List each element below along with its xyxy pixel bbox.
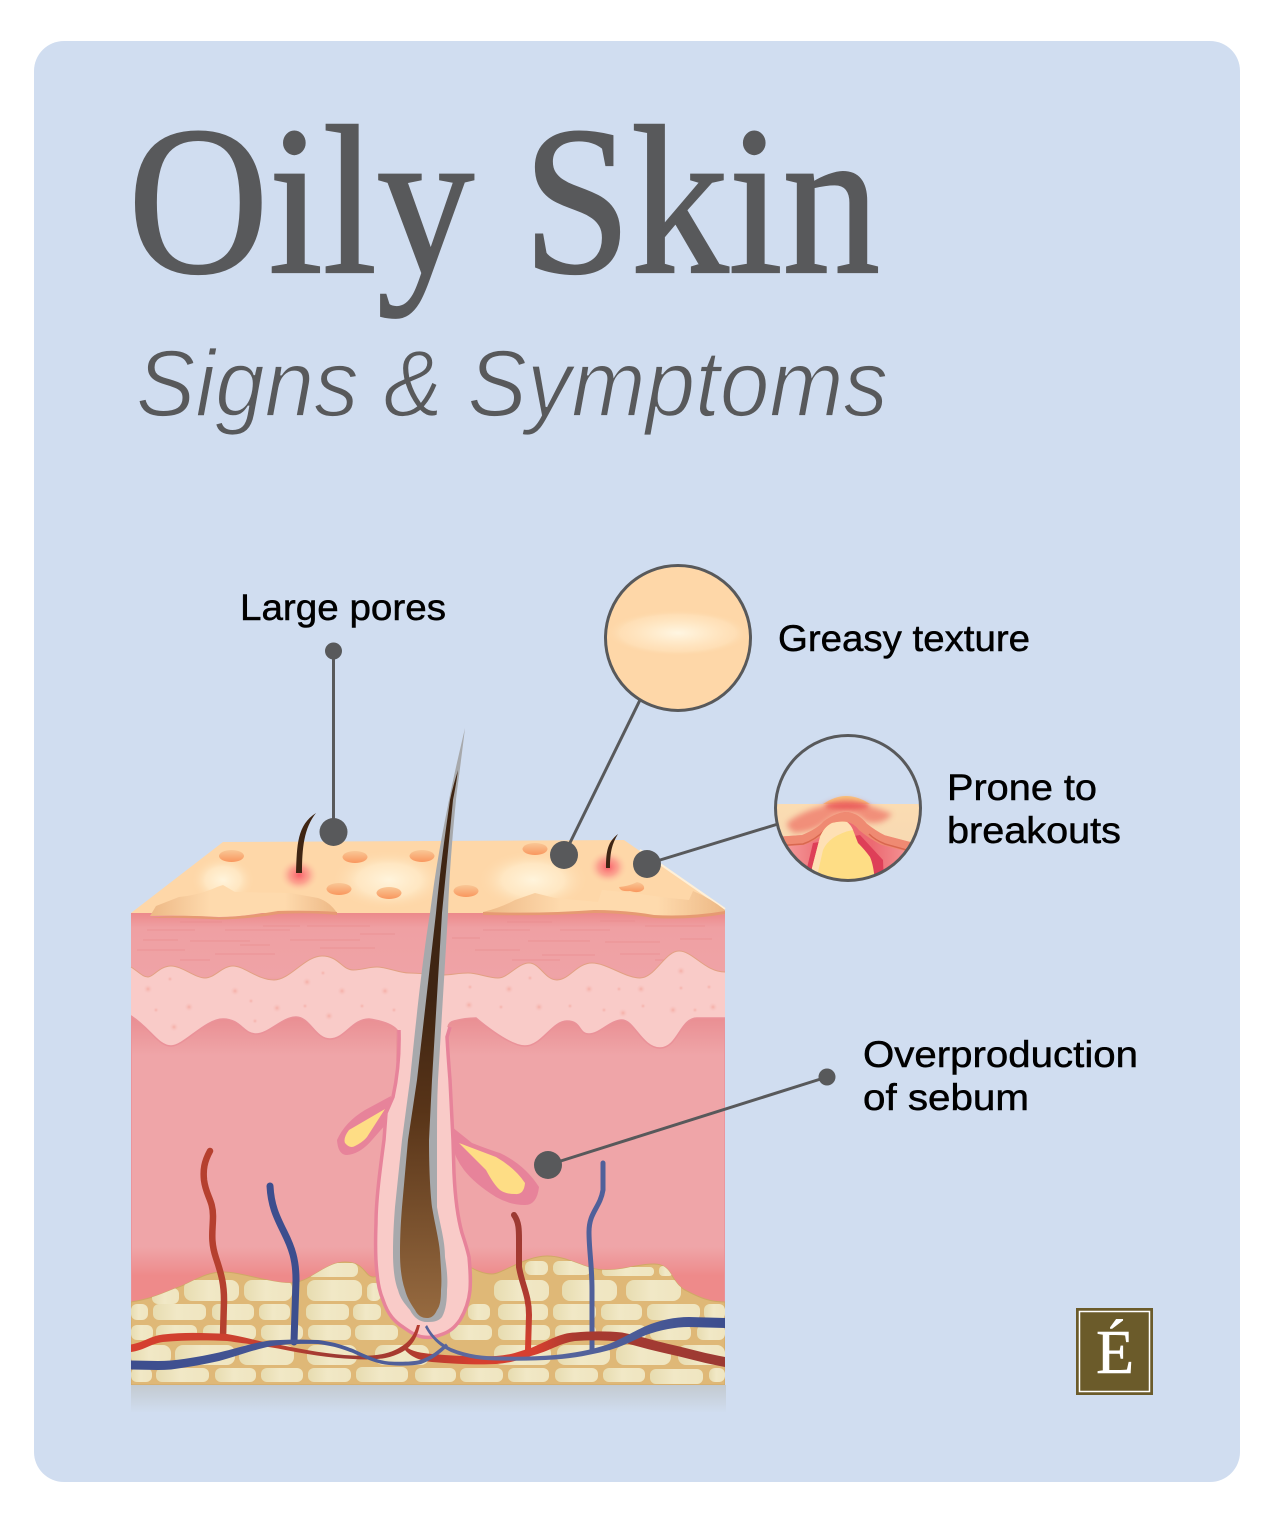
label: Greasy texture (778, 618, 1030, 659)
brand logo: É (1096, 1319, 1134, 1387)
pointer line and dots (320, 642, 348, 846)
label: breakouts (947, 810, 1121, 851)
pointer (534, 1068, 836, 1179)
skin top surface (131, 840, 725, 920)
skin cross-section diagram (131, 728, 726, 1413)
callout: prone to breakouts (633, 736, 1121, 884)
hair follicle (337, 728, 539, 1337)
follicle sheath (376, 1027, 470, 1337)
callout: large pores (240, 587, 446, 846)
small hair left (296, 813, 316, 873)
fat layer (131, 1256, 725, 1385)
small hair right (606, 834, 618, 868)
red artery right (405, 1331, 725, 1367)
blue artery left (131, 1340, 448, 1370)
hair shaft (400, 770, 458, 1318)
label: Overproduction (863, 1034, 1138, 1075)
pale layer speckles (143, 966, 718, 1032)
callout: greasy texture (550, 566, 1030, 869)
red capillary right (514, 1215, 529, 1350)
epidermis top layer (131, 913, 725, 988)
pointer (550, 700, 640, 869)
label: Large pores (240, 587, 446, 628)
magnified circle (774, 736, 925, 884)
gray hair sheath (393, 728, 465, 1322)
red capillary left (204, 1151, 224, 1337)
callout: overproduction of sebum (534, 1034, 1138, 1179)
pale pink dermal layer (131, 951, 725, 1060)
label (863, 1034, 1138, 1118)
red artery left (131, 1325, 420, 1359)
brand logo (1076, 1308, 1153, 1395)
label: Prone to (947, 767, 1097, 808)
pores (219, 843, 644, 899)
blood vessels (131, 1151, 725, 1370)
label: of sebum (863, 1077, 1029, 1118)
fat cells (131, 1261, 725, 1384)
skin mounds (150, 885, 337, 917)
blue artery right (425, 1317, 725, 1361)
label (947, 767, 1121, 851)
blue vein right (589, 1163, 603, 1350)
ground shadow (131, 1385, 726, 1413)
subtitle: Signs & Symptoms (136, 331, 888, 437)
magnified circle (606, 566, 750, 710)
right sebaceous gland (452, 1127, 539, 1205)
left sebaceous gland (337, 1096, 391, 1155)
blue vein left (270, 1186, 296, 1342)
dermis layer (131, 1016, 725, 1310)
pointer (633, 824, 778, 878)
title: Oily Skin (128, 83, 880, 318)
